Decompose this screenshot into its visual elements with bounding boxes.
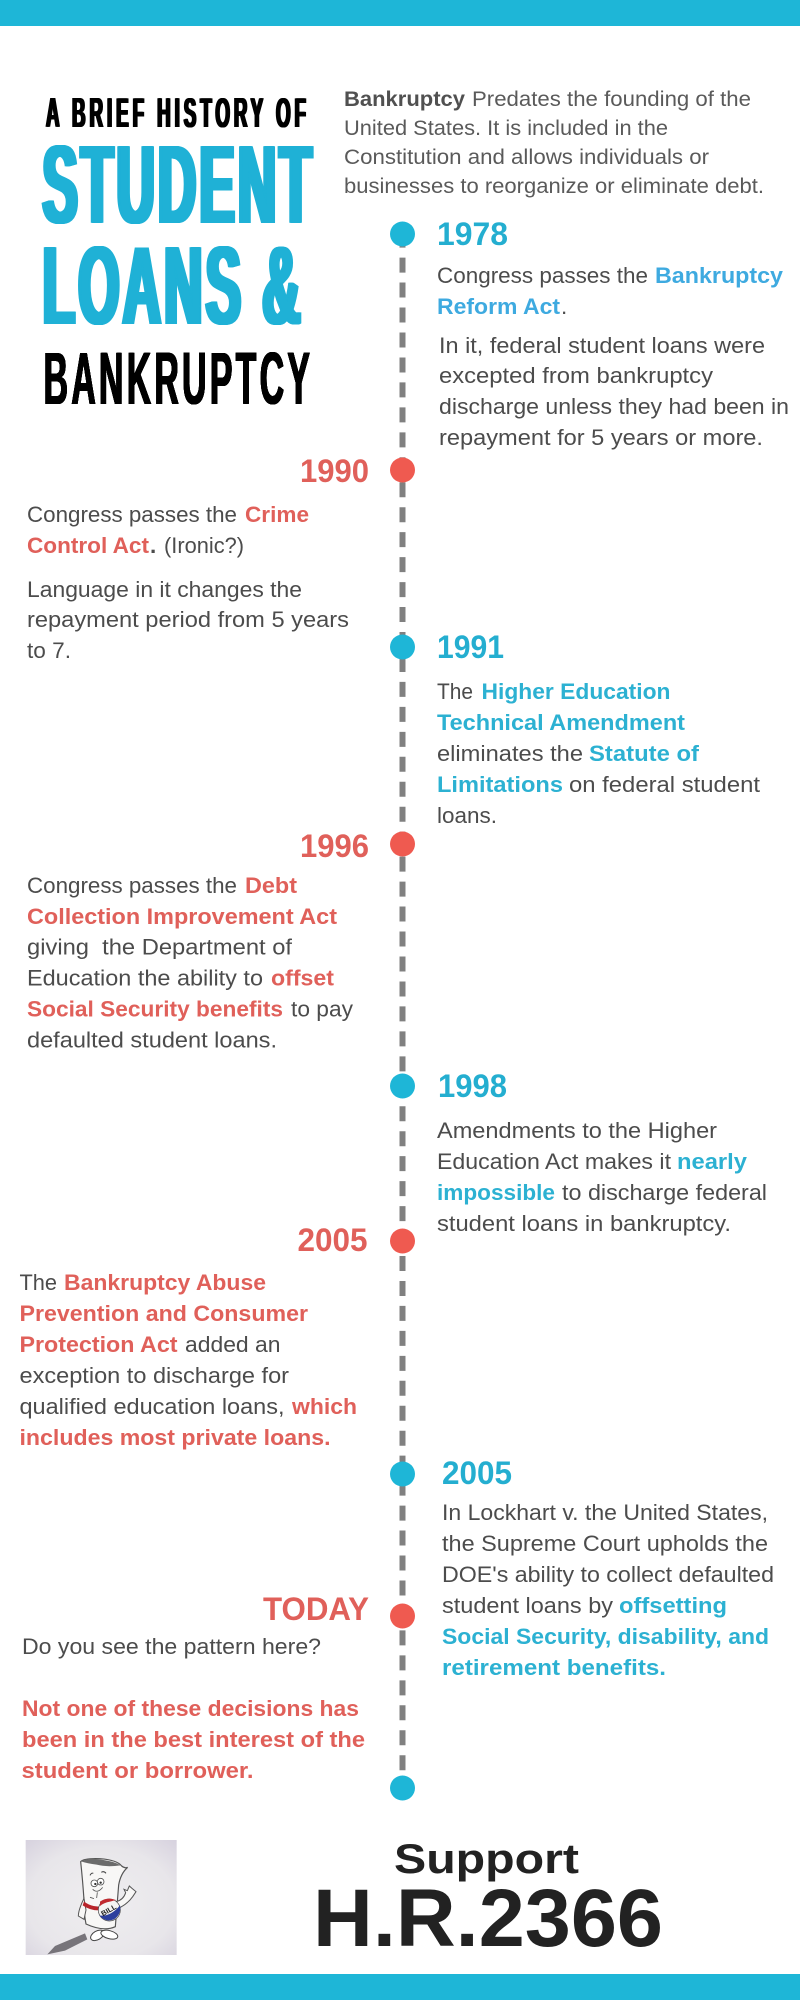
entry: today [22,1591,369,1783]
intro text [344,88,764,198]
1990 text: to 7. [27,638,71,663]
1978 text: . [561,294,567,319]
1978 text: In it, federal student loans were [439,333,765,358]
1991 text: Higher Education [482,679,670,704]
today text [22,1634,365,1783]
2005 blue text: DOE's ability to collect defaulted [442,1562,774,1587]
1990 text: . [150,533,156,558]
2005 red text: qualified education loans, [20,1394,284,1419]
timeline dot: end [390,1776,415,1800]
today text: student or borrower. [22,1758,254,1783]
1990 text: Congress passes the [27,502,237,527]
2005 red text: exception to discharge for [20,1363,290,1388]
today heading: TODAY [263,1591,369,1627]
1996 text: to pay [291,996,354,1022]
1978 text: Reform Act [437,294,561,319]
timeline dot: 2005 red [390,1228,415,1254]
title line: bankruptcy: BANKRUPTCY [44,338,314,421]
year 1991: 1991 [437,629,504,665]
timeline dot: 1991 [390,634,415,660]
entry: 1978 [437,216,789,450]
2005 blue text: the Supreme Court upholds the [442,1531,768,1556]
2005 blue text: retirement benefits. [442,1655,666,1680]
2005 red text: The [20,1270,57,1295]
entry: 2005 blue [442,1455,774,1680]
entry: 1991 [437,629,761,828]
intro text: Constitution and allows individuals or [344,146,709,169]
intro text: Bankruptcy [344,88,465,111]
1991 text: loans. [437,803,497,828]
image: bill cartoon: BILL [99,1902,119,1918]
1996 text: Congress passes the [27,873,237,898]
year 2005 blue: 2005 [442,1455,512,1491]
title line: a brief history of: A BRIEF HISTORY OF [46,90,310,136]
1998 text: student loans in bankruptcy. [437,1211,731,1236]
year 1990: 1990 [300,453,369,489]
image: bill cartoon [26,1840,177,1955]
1998 text: Education Act makes it [437,1149,672,1174]
1996 text [27,873,354,1052]
year 1998: 1998 [438,1068,507,1104]
1998 text: impossible [437,1180,555,1205]
entry: 1996 [27,828,369,1052]
1991 text: The [437,679,473,704]
1991 text: Technical Amendment [437,710,686,735]
timeline dot: 2005 blue [390,1462,415,1486]
intro text: Predates the founding of the [472,88,751,111]
1978 text [437,263,789,450]
1990 text: repayment period from 5 years [27,607,349,632]
intro text: businesses to reorganize or eliminate debt. [344,175,764,198]
intro text: United States. It is included in the [344,117,668,140]
1990 text [27,502,349,663]
today text: Do you see the pattern here? [22,1634,321,1659]
1990 text: (Ironic?) [164,533,244,558]
year 1996: 1996 [300,828,369,864]
title line: loans and: LOANS & [43,224,304,348]
today text: Not one of these decisions has [22,1696,359,1721]
2005 blue text: Social Security, disability, and [442,1624,769,1649]
title [43,90,316,421]
timeline dot: today [390,1604,415,1628]
1996 text: defaulted student loans. [27,1028,277,1052]
title line: student: STUDENT [43,123,316,247]
today text: been in the best interest of the [22,1727,365,1752]
entry: 1998 [437,1068,767,1236]
2005 red text [20,1270,357,1450]
2005 red text: added an [185,1332,280,1357]
timeline dot: 1978 [390,222,415,246]
1978 text: excepted from bankruptcy [439,363,714,388]
timeline dot: 1996 [390,832,415,856]
timeline dashed line [400,233,406,1788]
1998 text: to discharge federal [562,1180,767,1205]
1991 text: eliminates the [437,741,583,766]
year 2005 red: 2005 [298,1222,368,1258]
2005 red text: which [291,1394,357,1419]
bottom bar [0,1974,800,2000]
2005 blue text: offsetting [619,1593,727,1618]
1991 text [437,679,761,828]
entry: 1990 [27,453,369,663]
1978 text: repayment for 5 years or more. [439,425,763,450]
2005 blue text: student loans by [442,1593,614,1618]
1991 text: Statute of [589,741,700,766]
2005 red text: Prevention and Consumer [20,1301,308,1326]
2005 red text: includes most private loans. [20,1425,330,1450]
1996 text: Collection Improvement Act [27,904,338,929]
1991 text: on federal student [569,772,761,797]
1996 text: Education the ability to [27,966,263,990]
2005 red text: Protection Act [20,1332,178,1357]
1998 text: nearly [677,1149,748,1174]
2005 blue text: In Lockhart v. the United States, [442,1500,768,1525]
1996 text: Social Security benefits [27,996,283,1022]
1990 text: Crime [245,502,309,527]
1990 text: Control Act [27,533,150,558]
top bar [0,0,800,26]
bill number: H.R.2366 [313,1873,663,1964]
2005 red text: Bankruptcy Abuse [64,1270,266,1295]
1991 text: Limitations [437,772,563,797]
1996 text: offset [271,966,335,990]
1978 text: Congress passes the [437,263,648,288]
1978 text: discharge unless they had been in [439,394,789,419]
timeline dot: 1990 [390,458,415,482]
1998 text [437,1118,767,1236]
1990 text: Language in it changes the [27,577,302,602]
2005 blue text [442,1500,774,1680]
1996 text: Debt [245,873,298,898]
timeline dot: 1998 [390,1074,415,1098]
year 1978: 1978 [437,216,508,252]
support heading: Support [394,1835,579,1882]
1998 text: Amendments to the Higher [437,1118,718,1143]
entry: 2005 red [20,1222,368,1450]
1996 text: giving the Department of [27,934,293,960]
1978 text: Bankruptcy [655,263,783,288]
